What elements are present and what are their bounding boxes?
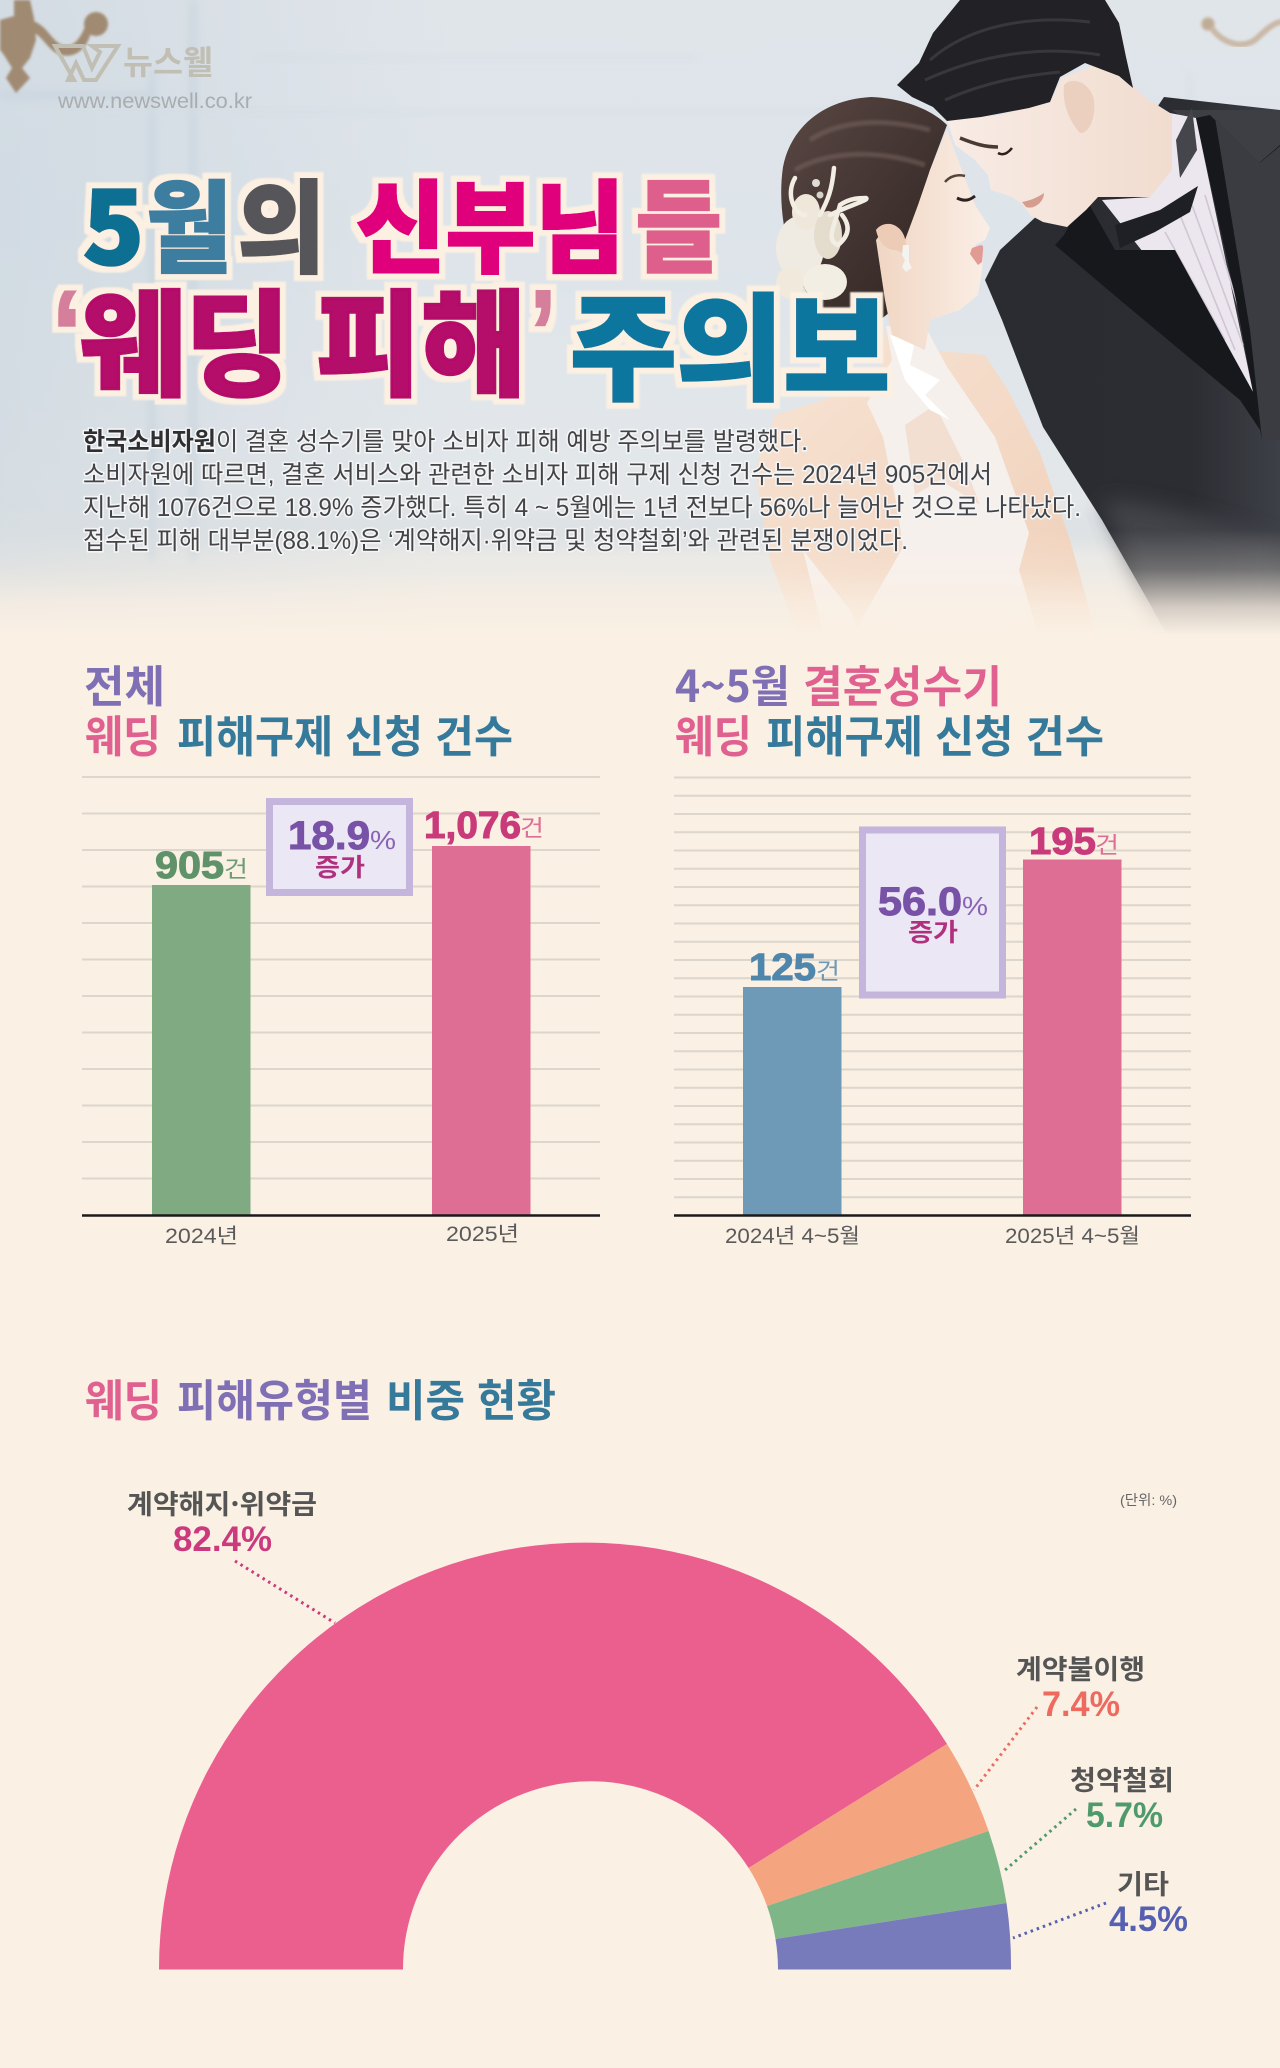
title line 2: ’ <box>530 266 556 400</box>
heading: total: 웨딩 <box>85 701 161 765</box>
groom neck and face <box>947 65 1172 227</box>
heading: damage types: 피해유형별 <box>177 1365 372 1429</box>
value 905: 건 <box>224 850 248 884</box>
bride eyebrow <box>945 175 965 182</box>
heading: peak season <box>675 651 1104 765</box>
segment 4.5% <box>776 1903 1011 1970</box>
label: 4.5% <box>1013 1863 1188 1939</box>
callout: 56.0% increase: % <box>962 891 988 921</box>
bride body <box>756 330 1088 608</box>
hero banner <box>0 0 1280 641</box>
intro line 3: 지난해 1076건으로 18.9% 증가했다. 특히 4 ~ 5월에는 1년 전보다 56%나 늘어난 것으로 나타났다. <box>83 494 1081 522</box>
title line 2: 주의보 <box>570 258 890 424</box>
axis label 2024 4~5: 2024년 4~5월 <box>725 1225 860 1248</box>
label: 7.4% <box>974 1648 1145 1790</box>
value 125: 건 <box>816 952 840 986</box>
bar 2025 <box>432 846 530 1215</box>
bride dress lace <box>804 326 1031 612</box>
groom eye <box>998 148 1012 154</box>
heading: peak season: 피해구제 신청 건수 <box>766 701 1104 765</box>
axis label 2025: 2025년 <box>446 1223 519 1246</box>
heading: total <box>84 651 513 765</box>
title line 2: 피해 <box>316 254 526 420</box>
bride lips <box>970 245 983 265</box>
value 195: 건 <box>1095 826 1119 860</box>
title line 1: 5 <box>83 148 144 293</box>
bride face <box>876 130 990 350</box>
bottom fade <box>0 530 1280 641</box>
heading: total: 전체 <box>84 651 165 715</box>
callout: 56.0% increase <box>862 830 1002 995</box>
axis label 2024: 2024년 <box>165 1225 238 1248</box>
bride hair flower <box>776 168 867 300</box>
groom ear <box>1064 81 1094 133</box>
value 1,076: 1,076 <box>424 805 521 847</box>
value 125: 125 <box>749 947 816 989</box>
value 125 <box>749 947 840 989</box>
half donut chart <box>159 1543 1011 1970</box>
photo: couple <box>755 0 1280 640</box>
bride earring <box>902 245 912 272</box>
groom lapel <box>1055 115 1280 440</box>
unit note: (단위: %) <box>1120 1492 1177 1508</box>
logo <box>52 44 252 108</box>
heading: peak season: 웨딩 <box>675 701 752 765</box>
intro line 1: 한국소비자원이 결혼 성수기를 맞아 소비자 피해 예방 주의보를 발령했다. <box>83 428 808 456</box>
wall sconce left <box>0 0 108 93</box>
title line 1 <box>83 148 722 293</box>
label: 7.4%: 계약불이행 <box>1016 1648 1145 1687</box>
groom eyebrow <box>960 138 998 147</box>
logo name: 뉴스웰 <box>123 36 213 84</box>
groom lapel shade <box>1215 118 1280 440</box>
intro line 2: 소비자원에 따르면, 결혼 서비스와 관련한 소비자 피해 구제 신청 건수는 2024년 905건에서 <box>83 461 992 489</box>
axis label 2025 4~5: 2025년 4~5월 <box>1005 1225 1140 1248</box>
label: 4.5%: 4.5% <box>1109 1900 1188 1939</box>
groom shirt <box>1102 98 1253 392</box>
bride hair <box>781 97 947 320</box>
bar 2024 4~5 <box>743 987 842 1215</box>
bar 2025 4~5 <box>1023 860 1122 1215</box>
label: 82.4% <box>127 1483 335 1623</box>
segment 7.4% <box>749 1744 989 1906</box>
groom suit <box>985 97 1280 640</box>
wall sconce right <box>1202 18 1280 44</box>
value 1,076: 건 <box>520 809 544 843</box>
heading: peak season: 결혼성수기 <box>803 651 1002 715</box>
segment 5.7% <box>767 1831 1006 1939</box>
panel: total chart <box>82 651 600 1248</box>
title line 2 <box>52 254 890 424</box>
groom bow tie <box>1115 108 1198 248</box>
label: 5.7% <box>1004 1759 1174 1871</box>
logo mark <box>55 46 118 80</box>
logo url: www.newswell.co.kr <box>57 90 252 113</box>
title line 1: 신부님 <box>356 148 625 293</box>
value 195: 195 <box>1029 821 1096 863</box>
bride hair shine <box>795 123 930 170</box>
title line 1: 월 <box>146 148 232 293</box>
heading: damage types <box>85 1365 556 1429</box>
bar 2024 <box>152 885 250 1215</box>
title <box>52 148 890 424</box>
callout: 56.0% increase: 56.0 <box>878 880 962 924</box>
callout: 56.0% increase: 증가 <box>908 913 958 949</box>
intro line 4: 접수된 피해 대부분(88.1%)은 ‘계약해지·위약금 및 청약철회’와 관련된 분쟁이었다. <box>83 527 908 555</box>
title line 2: 웨딩 <box>80 254 290 420</box>
label: 4.5%: 기타 <box>1117 1863 1169 1902</box>
title line 1: 들 <box>635 148 722 293</box>
groom hair <box>897 0 1133 121</box>
value 905 <box>155 845 248 887</box>
label: 5.7%: 청약철회 <box>1070 1759 1174 1798</box>
callout: 18.9% increase: 18.9 <box>288 814 370 858</box>
heading: peak season: 4~5월 <box>675 651 790 715</box>
wall background <box>0 0 1280 640</box>
label: 82.4%: 계약해지·위약금 <box>127 1483 317 1522</box>
label: 7.4%: 7.4% <box>1042 1685 1120 1724</box>
heading: total: 피해구제 신청 건수 <box>177 701 513 765</box>
segment 82.4% <box>159 1543 947 1970</box>
heading: damage types: 웨딩 <box>85 1365 162 1429</box>
value 905: 905 <box>155 845 224 887</box>
callout: 18.9% increase <box>270 802 410 892</box>
label: 82.4%: 82.4% <box>173 1520 272 1559</box>
bride eye <box>957 196 975 200</box>
bride ear <box>876 224 906 253</box>
axis line <box>82 1214 600 1217</box>
heading: damage types: 비중 현황 <box>386 1365 556 1429</box>
axis line <box>674 1214 1191 1217</box>
title line 2: ‘ <box>52 266 82 400</box>
intro text block <box>83 428 1081 555</box>
panel: damage types <box>85 1365 1188 1970</box>
panel: peak season chart <box>674 651 1191 1248</box>
callout: 18.9% increase: 증가 <box>315 848 365 884</box>
title line 1: 의 <box>238 148 325 293</box>
label: 5.7%: 5.7% <box>1086 1796 1163 1835</box>
callout: 18.9% increase: % <box>370 825 396 855</box>
groom shirt pleats <box>1164 194 1244 350</box>
groom lips <box>1022 193 1044 208</box>
